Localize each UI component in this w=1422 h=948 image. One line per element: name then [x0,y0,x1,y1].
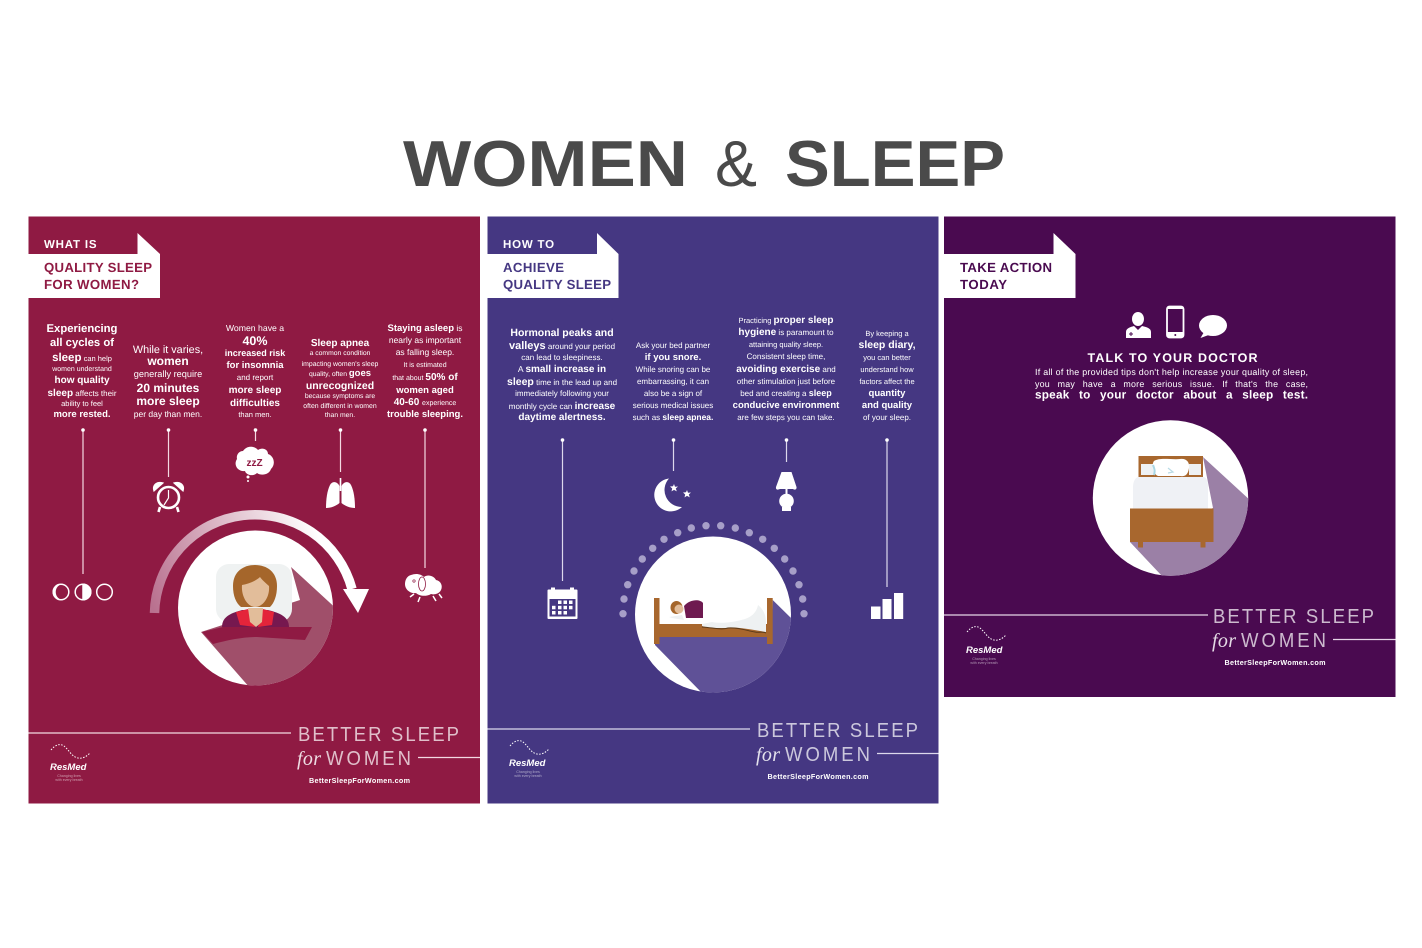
text block: all cycles of sleep: Experiencing [47,323,118,335]
text block: all cycles of sleep: women understand [51,365,112,373]
text block: snoring: Ask your bed partner [636,341,710,350]
text block: insomnia risk: than men. [238,410,272,419]
arrow: curved arc [154,515,369,613]
text block: all cycles of sleep: how quality [54,375,110,386]
footer: better sleep for women: BETTER SLEEP [298,723,459,746]
heading: what is quality sleep: WHAT IS [44,239,97,251]
heading: how to achieve quality sleep [488,233,618,298]
text block: insomnia risk: Women have a [226,323,284,333]
text block: talk to your doctor: speak to your doctor about a sleep test. [1035,388,1308,402]
heading: how to achieve quality sleep: QUALITY SLEEP [503,277,611,292]
logo: ResMed [509,741,549,778]
icon: zzz thought cloud [236,447,274,482]
text block: insomnia risk: difficulties [230,398,280,409]
text block: sleep hygiene: Practicing proper sleep [738,315,834,326]
heading: what is quality sleep: QUALITY SLEEP [44,260,152,275]
text block: sleep apnea: because symptoms are [305,393,375,400]
footer: better sleep for women: WOMEN [326,747,411,770]
text block: staying asleep: Staying asleep is [387,323,463,334]
text block: snoring: serious medical issues [633,401,713,410]
text block: hormonal peaks: can lead to sleepiness. [521,353,603,362]
text block: hormonal peaks: immediately following your [515,389,609,398]
panel: what is quality sleep for women [28,216,480,804]
text block: all cycles of sleep [47,323,118,420]
heading: what is quality sleep [28,233,160,298]
text block: sleep apnea [302,338,379,419]
illustration: person in bed in circle [635,536,795,700]
logo: ResMed: ResMed [966,645,1003,656]
heading: what is quality sleep: FOR WOMEN? [44,277,139,292]
icon: calendar [548,588,578,619]
text block: 20 minutes more sleep: more sleep [136,394,200,408]
text block: sleep apnea: impacting women's sleep [302,361,379,368]
footer: better sleep for women: for [756,744,780,766]
heading: how to achieve quality sleep: ACHIEVE [503,260,564,275]
title [403,127,1005,200]
text block: insomnia risk: 40% [242,334,268,348]
text block: sleep hygiene [733,315,840,422]
text block: staying asleep: nearly as important [389,335,462,345]
text block: snoring: such as sleep apnea. [633,412,713,422]
text block: sleep diary: factors affect the [859,377,915,386]
text block: hormonal peaks: daytime alertness. [518,412,606,423]
text block: sleep diary: sleep diary, [858,339,916,351]
panel: how to achieve quality sleep [488,216,938,804]
footer: better sleep for women: BETTER SLEEP [1213,605,1374,628]
text block: sleep hygiene: bed and creating a sleep [740,388,832,398]
icon: sheep [405,574,442,602]
icon: bedside lamp [776,472,797,511]
text block: sleep hygiene: conducive environment [733,400,840,411]
icon: lungs [326,478,355,508]
text block: staying asleep [387,323,463,420]
text block: sleep hygiene: avoiding exercise and [736,364,836,375]
text block: sleep apnea: Sleep apnea [311,338,370,349]
connector lines [561,438,889,587]
text block: snoring: if you snore. [645,352,701,363]
title: SLEEP [785,127,1005,200]
logo: ResMed: ResMed [509,758,546,769]
icon: bar chart [871,593,903,619]
logo: ResMed: with every breath [55,778,83,782]
text block: talk to your doctor: TALK TO YOUR DOCTOR [1088,351,1258,365]
text block: sleep diary: quantity [869,388,906,399]
text block: sleep diary: By keeping a [865,329,910,338]
text block: all cycles of sleep: sleep affects their [47,388,117,399]
footer: better sleep for women: WOMEN [1241,629,1326,652]
text block: insomnia risk: increased risk [225,348,286,358]
text block: sleep diary: of your sleep. [863,413,911,422]
icon: speech bubble [1199,315,1227,338]
text block: sleep diary: and quality [862,400,913,411]
text block: 20 minutes more sleep: 20 minutes [137,381,200,395]
illustration: woman sleeping in circle [178,530,333,686]
text block: staying asleep: trouble sleeping. [387,409,463,420]
icon: zzz thought cloud: zzZ [246,458,263,469]
text block: snoring [633,341,713,422]
text block: sleep diary [858,329,916,422]
logo: ResMed [50,745,90,782]
panel: take action today [944,216,1396,697]
footer: better sleep for women [944,605,1396,667]
text block: hormonal peaks: valleys around your period [509,340,615,352]
text block: staying asleep: women aged [395,385,454,396]
footer: better sleep for women: BETTER SLEEP [757,719,918,742]
footer: better sleep for women: BetterSleepForWomen.com [768,772,868,781]
text block: talk to your doctor [1035,351,1308,402]
text block: insomnia risk [225,323,286,419]
icon: doctor [1126,312,1151,338]
text block: hormonal peaks: Hormonal peaks and [510,327,614,339]
text block: all cycles of sleep: more rested. [53,409,111,420]
icon: moon and stars [654,478,691,511]
logo: ResMed [966,627,1006,665]
text block: 20 minutes more sleep [133,344,203,419]
icon: moon phases [53,584,112,600]
logo: ResMed: with every breath [514,774,542,778]
text block: sleep apnea: unrecognized [306,380,374,392]
heading: how to achieve quality sleep: HOW TO [503,239,555,251]
text block: all cycles of sleep: sleep can help [52,352,112,364]
text block: insomnia risk: for insomnia [226,360,284,371]
text block: sleep hygiene: attaining quality sleep. [749,340,823,349]
text block: hormonal peaks: sleep time in the lead up and [507,376,617,388]
text block: insomnia risk: and report [237,373,274,382]
text block: staying asleep: as falling sleep. [396,347,454,357]
text block: all cycles of sleep: ability to feel [61,399,103,408]
footer: better sleep for women: BetterSleepForWomen.com [1224,658,1326,667]
text block: snoring: also be a sign of [644,389,703,398]
text block: sleep hygiene: Consistent sleep time, [747,352,825,361]
text block: hormonal peaks [507,327,617,423]
text block: snoring: embarrassing, it can [637,377,709,386]
footer: better sleep for women: BetterSleepForWomen.com [309,776,410,785]
text block: staying asleep: that about 50% of [392,372,458,383]
heading: take action today: TAKE ACTION [960,260,1052,275]
title: WOMEN [403,127,688,200]
text block: insomnia risk: more sleep [229,385,281,396]
text block: sleep diary: you can better [863,353,911,362]
text block: sleep apnea: often different in women [303,403,377,410]
logo: ResMed: with every breath [970,661,998,665]
footer: better sleep for women [28,723,480,785]
logo: ResMed: Changing lives [57,774,81,778]
text block: 20 minutes more sleep: per day than men. [134,409,202,419]
text block: all cycles of sleep: all cycles of [50,337,114,349]
text block: sleep diary: understand how [860,365,914,374]
text block: staying asleep: It is estimated [403,361,447,369]
connector lines [81,428,427,574]
logo: ResMed: Changing lives [516,770,540,774]
footer: better sleep for women [488,719,938,781]
text block: sleep hygiene: hygiene is paramount to [738,327,834,338]
icon: alarm clock [154,482,183,512]
text block: 20 minutes more sleep: While it varies, [133,344,203,356]
text block: sleep apnea: quality, often goes [309,368,371,379]
text block: sleep apnea: a common condition [310,350,371,357]
heading: take action today [944,233,1076,298]
heading: take action today: TODAY [960,277,1007,292]
text block: sleep hygiene: are few steps you can take. [737,413,835,422]
text block: sleep hygiene: other stimulation just before [737,377,836,386]
icon: smartphone [1167,306,1184,338]
illustration: bed from above in circle [1093,420,1252,580]
logo: ResMed: ResMed [50,762,87,773]
text block: talk to your doctor: you may have a more serious issue. If that's the case, [1035,379,1308,389]
text block: hormonal peaks: A small increase in [518,364,606,375]
text block: staying asleep: 40-60 experience [394,397,456,408]
footer: better sleep for women: WOMEN [785,743,870,766]
text block: sleep apnea: than men. [325,412,355,419]
text block: 20 minutes more sleep: women [146,354,189,368]
text block: hormonal peaks: monthly cycle can increase [509,401,616,412]
text block: snoring: While snoring can be [636,365,711,374]
illustration: dotted arc [619,522,808,617]
footer: better sleep for women: for [1212,630,1236,652]
footer: better sleep for women: for [297,748,321,770]
title: & [715,127,757,200]
logo: ResMed: Changing lives [972,657,996,661]
text block: talk to your doctor: If all of the provided tips don't help increase your quality of sleep, [1035,367,1308,377]
text block: 20 minutes more sleep: generally require [134,369,202,379]
